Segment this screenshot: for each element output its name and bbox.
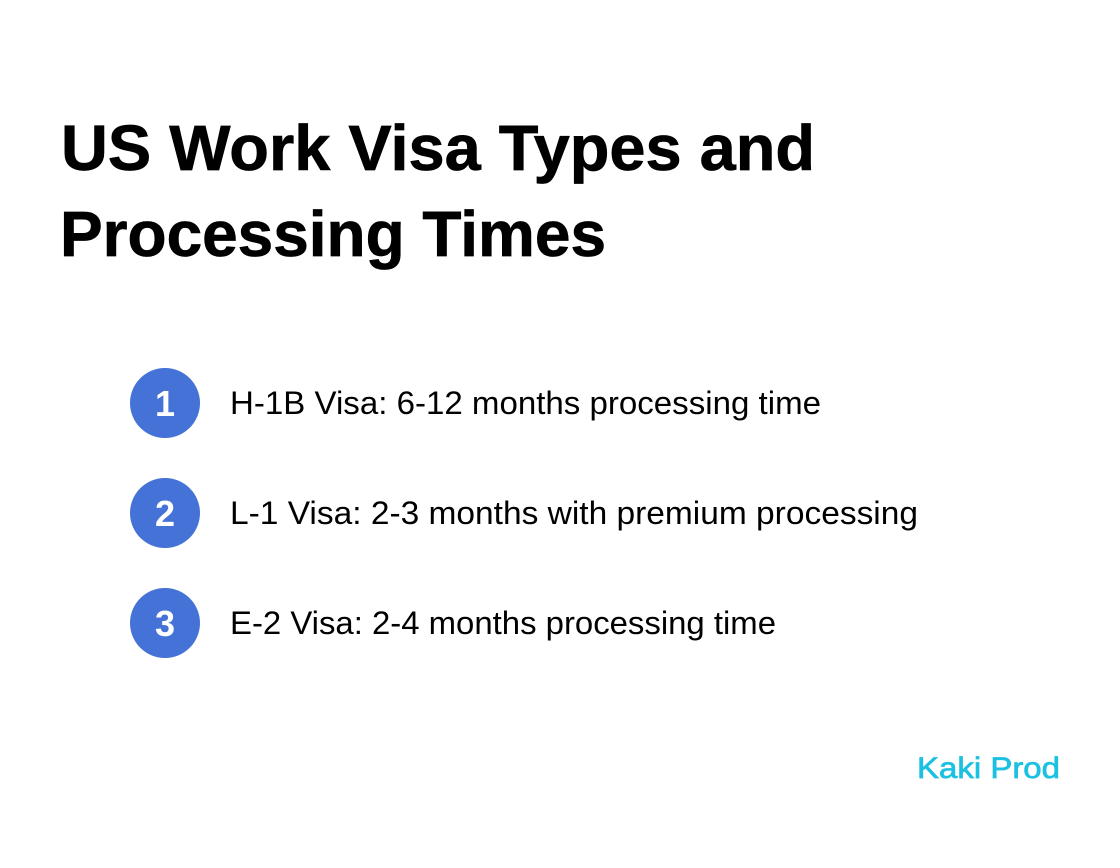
title <box>60 112 815 270</box>
title: Processing Times <box>60 198 606 270</box>
label 2: L-1 Visa: 2-3 months with premium processing <box>230 495 918 531</box>
number badge 3: 3 <box>155 603 175 644</box>
list item 3 <box>130 588 776 658</box>
number badge 2 <box>130 478 200 548</box>
number badge 1 <box>130 368 200 438</box>
number badge 2: 2 <box>155 493 175 534</box>
logo: Kaki Prod: Kaki Prod <box>917 752 1060 785</box>
title: US Work Visa Types and <box>61 112 815 184</box>
label 3: E-2 Visa: 2-4 months processing time <box>230 605 776 641</box>
number badge 1: 1 <box>155 383 175 424</box>
list item 2 <box>130 478 918 548</box>
number badge 3 <box>130 588 200 658</box>
label 1: H-1B Visa: 6-12 months processing time <box>230 385 821 421</box>
list item 1 <box>130 368 821 438</box>
